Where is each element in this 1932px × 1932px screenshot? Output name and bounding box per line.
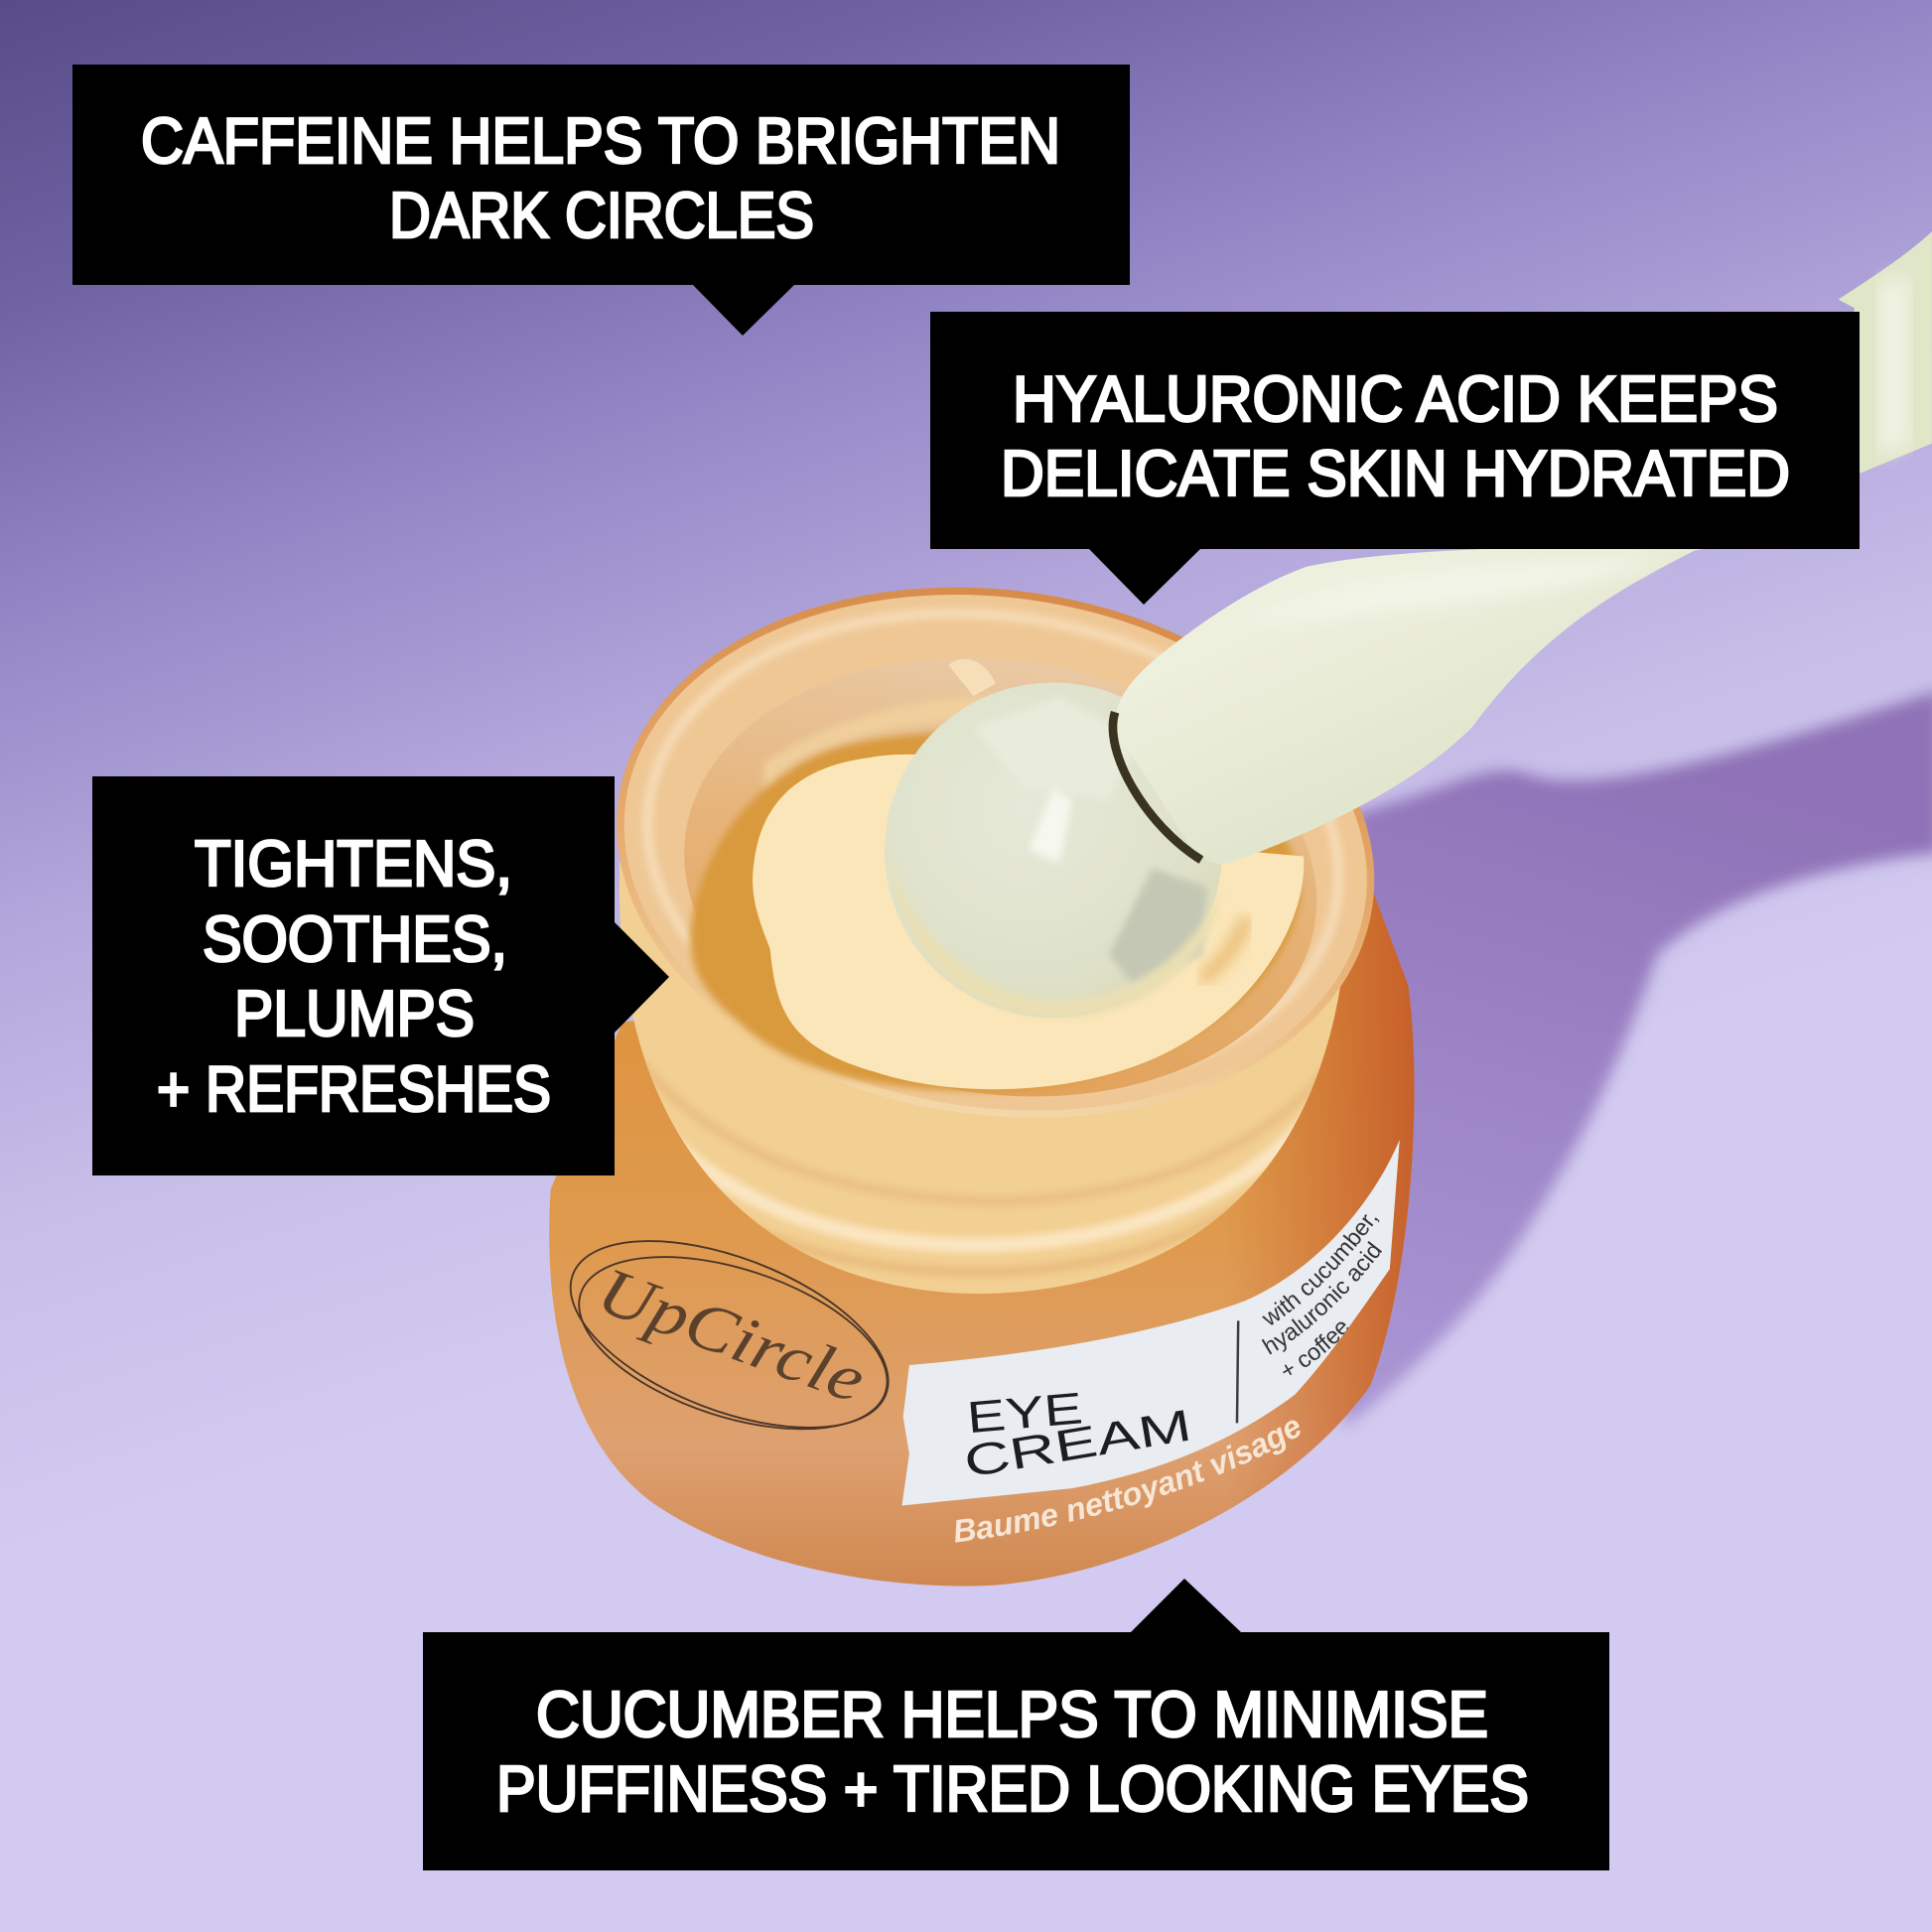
label title line 2: CREAM (961, 1401, 1194, 1487)
callout text (157, 827, 551, 1125)
cast shadow (1343, 690, 1932, 1430)
jar threads with cream (620, 862, 1340, 1295)
callout box (930, 312, 1860, 605)
callout: cucumber (423, 1579, 1609, 1870)
french product text: Baume nettoyant visage (955, 1420, 1301, 1543)
label ingredients: hyaluronic acid (1261, 1241, 1382, 1354)
callout: benefits (92, 776, 669, 1175)
product photo: jar and roller (549, 231, 1932, 1624)
jar label (901, 1140, 1400, 1505)
callout text (141, 104, 1060, 251)
callout text: PLUMPS (234, 977, 475, 1049)
callout: caffeine (72, 65, 1130, 336)
brand logo: UpCircle (589, 1254, 875, 1418)
brand logo (546, 1203, 913, 1465)
label ingredients: with cucumber, (1262, 1214, 1380, 1325)
glass rim (586, 544, 1405, 1162)
callout text: DELICATE SKIN HYDRATED (1001, 437, 1790, 509)
cream inside jar (690, 659, 1304, 1091)
callout text: SOOTHES, (203, 902, 507, 975)
callout text: HYALURONIC ACID KEEPS (1013, 362, 1778, 435)
callout text: DARK CIRCLES (389, 179, 814, 251)
callout text: CAFFEINE HELPS TO BRIGHTEN (141, 104, 1060, 177)
callout text (1001, 362, 1790, 509)
label title: EYE (965, 1384, 1085, 1443)
callout text: + REFRESHES (157, 1052, 551, 1125)
jar body (549, 894, 1415, 1587)
callout box (72, 65, 1130, 336)
callout text: TIGHTENS, (195, 827, 512, 899)
callout text: CUCUMBER HELPS TO MINIMISE (536, 1678, 1488, 1750)
callout: hyaluronic acid (930, 312, 1860, 605)
callout box (92, 776, 669, 1175)
callout text (496, 1678, 1529, 1825)
callout text: PUFFINESS + TIRED LOOKING EYES (496, 1752, 1529, 1825)
callout box (423, 1579, 1609, 1870)
roller handle (1113, 231, 1932, 864)
roller ball (885, 683, 1223, 1018)
label ingredients: + coffee (1283, 1322, 1348, 1376)
